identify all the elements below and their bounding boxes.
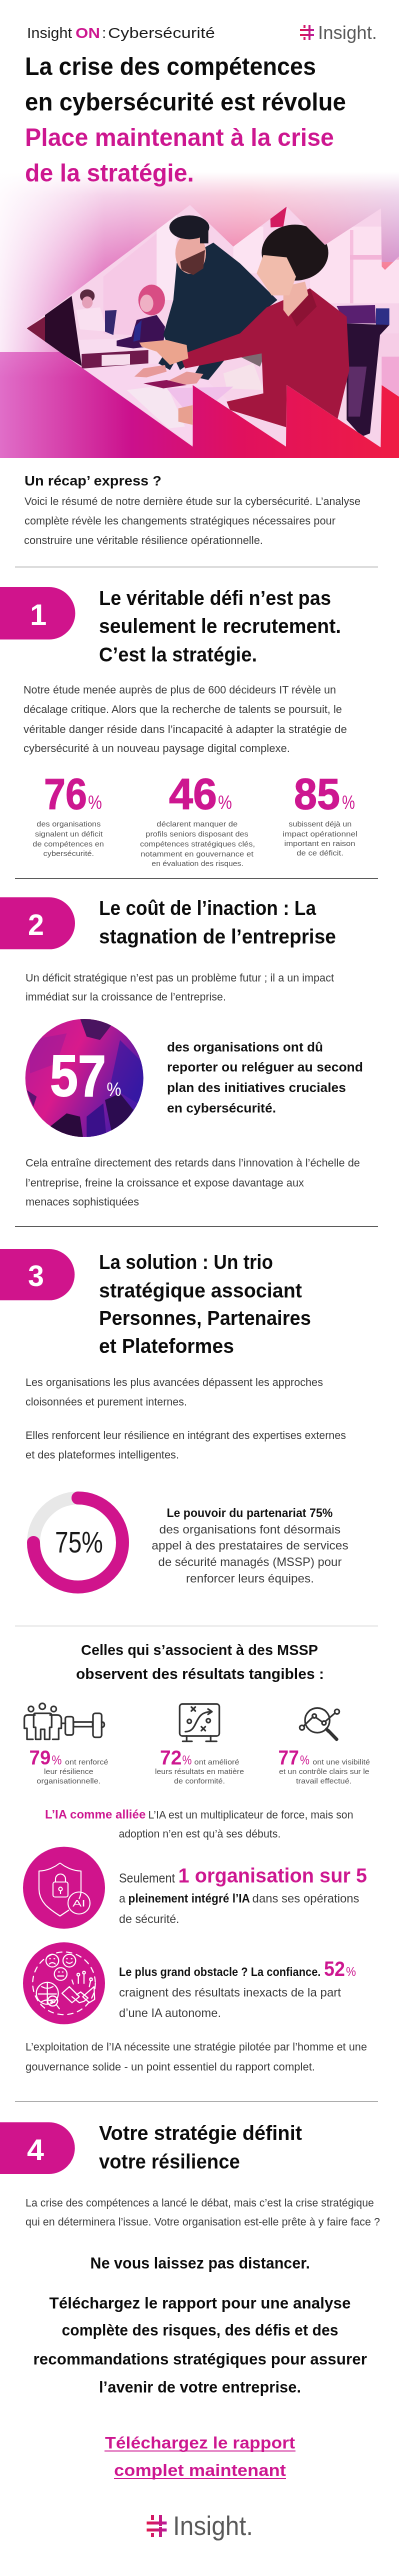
icon: team and barbell: [24, 1703, 104, 1739]
intro block: Un récap express: Un récap’ express ?: [24, 473, 162, 489]
donut chart: 75%: [34, 1498, 122, 1587]
stat: 79%: organisationnelle.: [37, 1778, 101, 1786]
stat text: 57% description: en cybersécurité.: [167, 1101, 276, 1115]
section 3 body text: Les organisations les plus avancées dépassent les approches: [26, 1377, 323, 1389]
stat: 72%: %: [182, 1752, 192, 1767]
stat: 46%: compétences stratégiques clés,: [140, 841, 255, 849]
stat: 72%: ont amélioré: [194, 1758, 239, 1766]
intro block: Un récap express: complète révèle les changements stratégiques nécessaires pour: [24, 515, 336, 527]
section 4 heading: votre résilience: [99, 2151, 240, 2173]
intro block: Un récap express: construire une véritable résilience opérationnelle.: [24, 535, 263, 547]
stat: 77%: ont une visibilité: [313, 1758, 370, 1766]
title: de la stratégie.: [25, 160, 194, 188]
section 4 heading: Votre stratégie définit: [99, 2123, 302, 2145]
stat: 76%: des organisations: [37, 821, 101, 829]
stat circle: 57%: 57: [50, 1045, 106, 1109]
text: trust obstacle 52%: craignent des résultats inexacts de la part: [119, 1987, 342, 2000]
stat: 76%: cybersécurité.: [43, 850, 94, 858]
stat: 77%: travail effectué.: [296, 1778, 352, 1786]
stat: 85%: subissent déjà un: [289, 821, 352, 829]
section 3 body text: et des plateformes intelligentes.: [26, 1449, 179, 1461]
hero photo: colleagues at a desk: [26, 205, 399, 448]
section 2 intro text: immédiat sur la croissance de l’entreprise.: [26, 992, 226, 1004]
intro block: Un récap express: Voici le résumé de notre dernière étude sur la cybersécurité. L’analyse: [24, 496, 360, 508]
title: [25, 53, 346, 188]
woman shirt: [180, 288, 349, 427]
stat: 76%: de compétences en: [33, 841, 104, 849]
donut text: partnership power: de sécurité managés (MSSP) pour: [158, 1556, 342, 1569]
stat: 72%: de conformité.: [174, 1778, 225, 1786]
icon: trust faces, brain and handshake: [23, 1942, 105, 2024]
stat: 79%: %: [52, 1752, 62, 1767]
call to action heading: complète des risques, des défis et des: [62, 2323, 339, 2340]
download link: [104, 2433, 296, 2480]
AI governance text: [26, 2042, 367, 2073]
section 3 body text: Elles renforcent leur résilience en intégrant des expertises externes: [26, 1430, 346, 1442]
section 2 heading: [99, 898, 336, 948]
donut text: partnership power: renforcer leurs équipes.: [186, 1573, 314, 1586]
text: trust obstacle 52%: d’une IA autonome.: [119, 2007, 221, 2020]
stat circle: 57%: %: [107, 1080, 121, 1101]
section 4 heading: [99, 2123, 302, 2173]
far desk: [78, 338, 166, 370]
stat: 76%: [33, 770, 104, 858]
stat: 85%: de ce déficit.: [297, 850, 343, 858]
section 3 body text: [26, 1377, 346, 1461]
text: 1 organisation sur 5: Seulement: [119, 1871, 175, 1885]
text: trust obstacle 52%: %: [346, 1964, 356, 1979]
section 2 closing text: l’entreprise, freine la croissance et expose davantage aux: [26, 1178, 304, 1190]
section 1 body text: décalage critique. Alors que la recherche de talents se poursuit, le: [24, 704, 342, 716]
section 4 badge: 4: [27, 2134, 44, 2167]
text: 1 organisation sur 5: 1 organisation sur 5: [178, 1865, 367, 1887]
section 2 badge: 2: [28, 909, 44, 942]
seated woman background: [138, 285, 165, 315]
icon: magnifier with chart: [300, 1708, 339, 1739]
text: 1 organisation sur 5: dans ses opérations: [252, 1893, 359, 1906]
AI as ally intro: L’IA est un multiplicateur de force, mais son: [148, 1810, 353, 1822]
title: en cybersécurité est révolue: [25, 89, 346, 117]
section 3 body text: cloisonnées et purement internes.: [26, 1396, 187, 1408]
stat: 72%: leurs résultats en matière: [155, 1768, 244, 1776]
stat: 72%: [155, 1746, 244, 1786]
stat: 46%: [140, 770, 255, 868]
section 3 heading: La solution : Un trio: [99, 1252, 273, 1274]
section 2 heading: Le coût de l’inaction : La: [99, 898, 317, 920]
title: La crise des compétences: [25, 53, 316, 81]
stat text: 57% description: des organisations ont dû: [167, 1040, 323, 1054]
section 3 heading: Personnes, Partenaires: [99, 1308, 311, 1330]
far man: [76, 307, 107, 332]
section 1 heading: [99, 588, 341, 667]
AI governance text: L’exploitation de l’IA nécessite une stratégie pilotée par l’homme et une: [26, 2042, 367, 2054]
stat: 77%: [278, 1746, 370, 1786]
AI as ally intro: L’IA comme alliée: [45, 1808, 146, 1822]
text: trust obstacle 52%: 52: [324, 1958, 345, 1981]
woman head: [283, 282, 308, 317]
keyboard and papers: [127, 385, 185, 428]
MSSP results heading: Celles qui s’associent à des MSSP: [81, 1642, 318, 1659]
call to action heading: l’avenir de votre entreprise.: [99, 2379, 301, 2396]
stat: 46%: profils seniors disposant des: [146, 831, 249, 839]
binder: [82, 350, 148, 369]
stat: 46%: déclarent manquer de: [157, 821, 238, 829]
stat: 79%: [29, 1746, 108, 1786]
stat: 76%: signalent un déficit: [35, 831, 103, 839]
man trousers: [241, 353, 262, 366]
icon: shield with lock and AI: [23, 1847, 105, 1929]
section 3 heading: stratégique associant: [99, 1280, 302, 1302]
text: 1 organisation sur 5: de sécurité.: [119, 1913, 179, 1926]
AI governance text: gouvernance solide - un point essentiel du rapport complet.: [26, 2061, 315, 2073]
logo: Insight bottom: Insight.: [173, 2511, 253, 2541]
logo: Insight top: Insight.: [318, 23, 377, 43]
section 1 body text: cybersécurité à un nouveau paysage digital complexe.: [24, 743, 290, 755]
section 3 heading: [99, 1252, 311, 1358]
download link: Téléchargez le rapport: [105, 2433, 295, 2452]
call to action heading: recommandations stratégiques pour assurer: [33, 2351, 367, 2368]
icon: strategy board: [180, 1704, 219, 1741]
section 4 body text: La crise des compétences a lancé le débat, mais c’est la crise stratégique: [26, 2197, 374, 2209]
pointing hand: [139, 340, 188, 365]
section 1 heading: seulement le recrutement.: [99, 616, 341, 638]
section 2 closing text: Cela entraîne directement des retards dans l’innovation à l’échelle de: [26, 1158, 360, 1170]
stat circle: 57%: [25, 1018, 147, 1140]
stat: 85%: [283, 770, 358, 858]
text: 1 organisation sur 5: [119, 1865, 367, 1926]
section 1 heading: Le véritable défi n’est pas: [99, 588, 331, 610]
stat text: 57% description: [167, 1040, 363, 1115]
section 2 closing text: menaces sophistiquées: [26, 1196, 139, 1208]
call to action heading: Téléchargez le rapport pour une analyse: [49, 2295, 351, 2312]
stat: 77%: et un contrôle clairs sur le: [279, 1768, 369, 1776]
man torso: [163, 243, 277, 370]
header: Insight ON Cybersécurité: Cybersécurité: [108, 25, 215, 42]
donut chart: 75%: 75%: [55, 1527, 103, 1560]
section 2 intro text: [26, 972, 335, 1004]
hero: photo banner with gradient chevrons: [0, 172, 399, 460]
text: trust obstacle 52%: Le plus grand obstacle ? La confiance.: [119, 1966, 321, 1979]
AI as ally intro: adoption n’en est qu’à ses débuts.: [119, 1829, 281, 1841]
section 1 body text: [24, 684, 347, 755]
section 1 body text: Notre étude menée auprès de plus de 600 décideurs IT révèle un: [24, 684, 336, 696]
MSSP results heading: [76, 1642, 324, 1683]
section 1 badge: [0, 587, 75, 640]
section 3 badge: [0, 1249, 75, 1300]
stat: 76%: 76: [44, 770, 87, 819]
text: 1 organisation sur 5: a: [119, 1893, 126, 1906]
stat: 85%: impact opérationnel: [283, 831, 358, 839]
stat: 72%: 72: [160, 1746, 182, 1769]
stat: 79%: ont renforcé: [65, 1758, 108, 1766]
right chair: [337, 305, 376, 323]
section 2 heading: stagnation de l’entreprise: [99, 926, 336, 948]
call to action heading: Ne vous laissez pas distancer.: [90, 2255, 310, 2272]
icon: shield with lock and AI: AI: [72, 1898, 86, 1908]
stat: 46%: en évaluation des risques.: [152, 860, 243, 868]
header: Insight ON Cybersécurité: [27, 25, 215, 42]
MSSP results heading: observent des résultats tangibles :: [76, 1666, 324, 1683]
section 2 badge: [0, 897, 75, 949]
header: Insight ON Cybersécurité: ON: [76, 25, 100, 42]
section 1 body text: véritable danger réside dans l’incapacité à adapter la stratégie de: [24, 724, 347, 736]
title: Place maintenant à la crise: [25, 124, 334, 152]
section 1 heading: C’est la stratégie.: [99, 645, 257, 667]
donut text: partnership power: appel à des prestataires de services: [152, 1540, 349, 1553]
man head: [175, 238, 206, 274]
donut text: partnership power: des organisations font désormais: [159, 1523, 341, 1536]
download link: complet maintenant: [114, 2461, 286, 2480]
stat text: 57% description: plan des initiatives cruciales: [167, 1081, 346, 1095]
header: Insight ON Cybersécurité: :: [102, 25, 106, 42]
section 1 badge: 1: [30, 599, 47, 632]
AI as ally intro: [45, 1808, 353, 1841]
stat: 77%: %: [300, 1752, 310, 1767]
header: Insight ON Cybersécurité: Insight: [27, 25, 73, 42]
text: trust obstacle 52%: [119, 1958, 356, 2020]
donut text: partnership power: Le pouvoir du partenariat 75%: [167, 1507, 333, 1520]
monitor: [27, 317, 45, 343]
stat: 79%: leur résilience: [44, 1768, 93, 1776]
man hands: [134, 365, 167, 377]
stat: 46%: %: [218, 793, 232, 814]
stat: 46%: notamment en gouvernance et: [141, 850, 253, 858]
section 2 intro text: Un déficit stratégique n’est pas un problème futur ; il a un impact: [26, 972, 335, 984]
intro block: Un récap express: [24, 473, 360, 547]
stat: 77%: 77: [278, 1746, 299, 1769]
stat text: 57% description: reporter ou reléguer au second: [167, 1061, 363, 1075]
stat: 46%: 46: [169, 770, 217, 819]
stat: 79%: 79: [29, 1746, 51, 1769]
call to action heading: [33, 2255, 367, 2396]
donut text: partnership power: [152, 1507, 349, 1586]
section 4 badge: [0, 2122, 75, 2174]
stat: 85%: important en raison: [284, 840, 355, 848]
section 4 body text: [26, 2197, 380, 2229]
stat: 85%: 85: [294, 770, 340, 819]
section 3 badge: 3: [28, 1260, 44, 1293]
stat: 76%: %: [88, 793, 102, 814]
section 2 closing text: [26, 1158, 360, 1208]
stat: 85%: %: [342, 793, 355, 814]
section 4 body text: qui en déterminera l’issue. Votre organisation est-elle prête à y faire face ?: [26, 2217, 380, 2229]
section 3 heading: et Plateformes: [99, 1336, 234, 1358]
text: 1 organisation sur 5: pleinement intégré l’IA: [128, 1893, 251, 1906]
